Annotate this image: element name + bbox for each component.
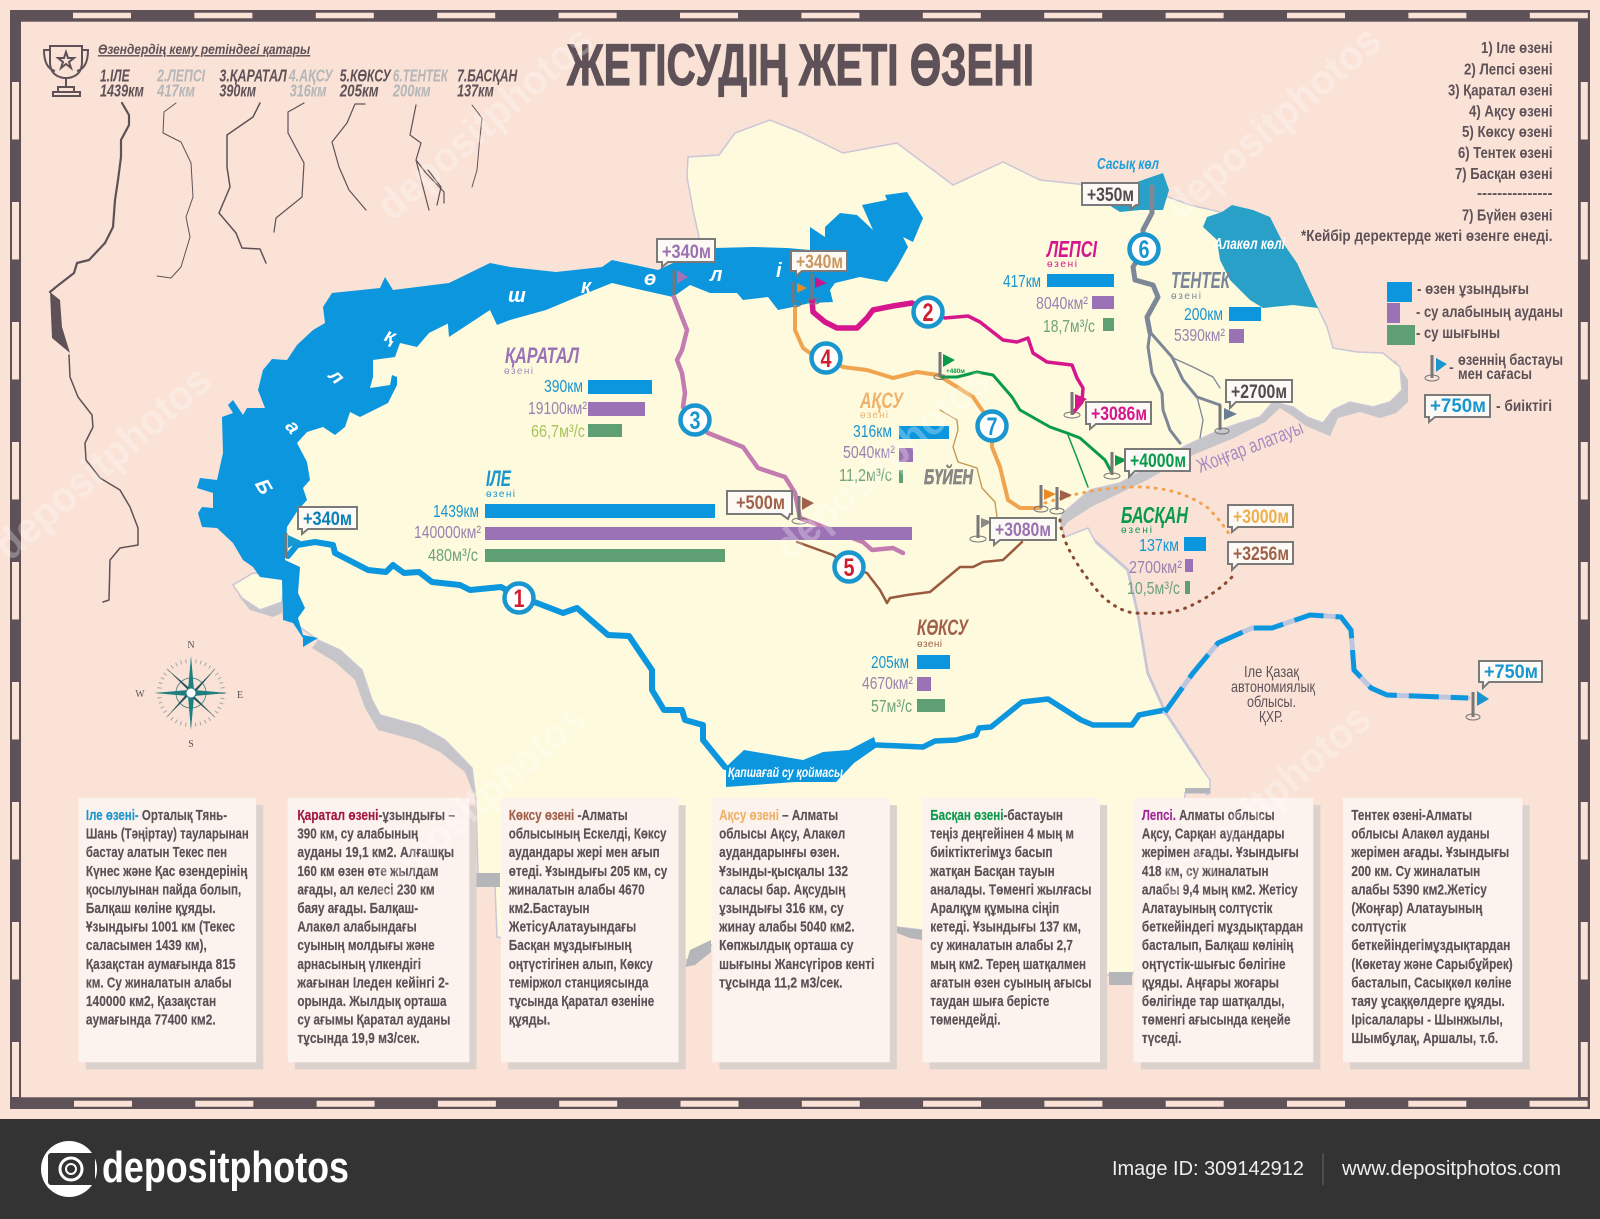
compass rose: W bbox=[135, 689, 145, 700]
map legend: - bbox=[1449, 359, 1454, 375]
river silhouettes ordered by length bbox=[50, 103, 482, 602]
bars: Koksu: өзені bbox=[917, 639, 942, 650]
map legend: өзеннің бастауы bbox=[1458, 352, 1563, 369]
panel: Koksu river: Көксу өзені -Алматы bbox=[509, 808, 628, 824]
panel: Tentek river: солтүстік bbox=[1351, 920, 1407, 936]
elevation callouts: +3256м bbox=[1233, 544, 1289, 565]
icon: trophy bbox=[44, 46, 88, 96]
bars: Ile: 140000км² bbox=[414, 522, 481, 542]
panel: Karatal river: ағады, ал келесі 230 км bbox=[297, 882, 435, 898]
elevation callouts: +4000м bbox=[1130, 451, 1186, 472]
map: land and water bbox=[233, 120, 1408, 985]
panel: Baskan river: Аралқұм құмына сіңіп bbox=[930, 901, 1059, 917]
panel: Ile river: аумағында 77400 км2. bbox=[86, 1012, 216, 1028]
bars: Aksu: 11,2м³/с bbox=[839, 465, 892, 485]
panel: Koksu river: облысының Ескелді, Көксу bbox=[509, 827, 667, 843]
panel: Karatal river: Алакөл алабындағы bbox=[297, 920, 417, 936]
panel: Lepsi river: Лепсі. Алматы облысы bbox=[1142, 808, 1275, 824]
river 6: Tentek bbox=[1133, 187, 1220, 443]
river list, top right: 4) Ақсу өзені bbox=[1469, 104, 1552, 121]
river 1: Ile with Kapshagay reservoir: Қапшағай су қоймасы bbox=[728, 764, 843, 780]
footer bar bbox=[0, 1119, 1600, 1219]
panel: Koksu river: құяды. bbox=[509, 1012, 550, 1028]
numbered river markers bbox=[504, 234, 1158, 613]
elevation callouts: +500м bbox=[736, 493, 785, 514]
footer bar: depositphotos bbox=[102, 1143, 349, 1192]
length ranking, top left: 205км bbox=[339, 81, 379, 101]
panel: Lepsi river: түседі. bbox=[1142, 1031, 1181, 1047]
dotted outline: Baskan source bbox=[1045, 487, 1234, 613]
lake Balkhash: л bbox=[709, 264, 723, 286]
river 3: Karatal bbox=[674, 297, 903, 553]
title: ЖЕТІСУДІҢ ЖЕТІ ӨЗЕНІ bbox=[566, 33, 1034, 98]
bars: Karatal: өзені bbox=[504, 366, 533, 377]
bars: Baskan: 2700км² bbox=[1129, 557, 1182, 577]
bars: Baskan: 137км bbox=[1139, 535, 1179, 555]
numbered river markers: 5 bbox=[844, 554, 855, 582]
stock watermark: depositphotos bbox=[1155, 16, 1390, 229]
river 7: Baskan bbox=[942, 372, 1112, 487]
length ranking, top left: 2.ЛЕПСІ bbox=[156, 66, 206, 86]
bars: Ile: 1439км bbox=[433, 501, 479, 521]
river list, top right: *Кейбір деректерде жеті өзенге енеді. bbox=[1301, 228, 1552, 245]
bars: Koksu: КӨКСУ bbox=[917, 615, 969, 640]
panel: Aksu river: Көпжылдық орташа су bbox=[719, 938, 854, 954]
length ranking, top left: 7.БАСҚАН bbox=[457, 66, 518, 86]
lake Sasyk bbox=[1087, 156, 1169, 212]
panel: Lepsi river: беткейіндегі мұздықтардан bbox=[1142, 920, 1303, 936]
lake Sasyk: Сасық көл bbox=[1097, 156, 1159, 173]
elevation callouts: +3086м bbox=[1091, 404, 1147, 425]
panel: Tentek river: Тентек өзені-Алматы bbox=[1351, 808, 1472, 824]
panel: Karatal river: баяу ағады. Балқаш- bbox=[297, 901, 418, 917]
elevation callouts bbox=[298, 183, 1542, 688]
elevation callouts: +340м bbox=[662, 242, 711, 263]
panel: Karatal river: тұсында 19,9 м3/сек. bbox=[297, 1031, 420, 1047]
panel: Baskan river: теңіз деңгейінен 4 мың м bbox=[930, 827, 1074, 843]
panel: Tentek river: (Көкетау және Сарыбұйрек) bbox=[1351, 957, 1513, 973]
compass rose bbox=[135, 640, 243, 750]
panel: Karatal river: ауданы 19,1 км2. Алғашқы bbox=[297, 845, 454, 861]
river list, top right: 1) Іле өзені bbox=[1481, 40, 1552, 57]
elevation callouts: +3080м bbox=[995, 520, 1051, 541]
panel: Lepsi river: құяды. Аңғары жоғары bbox=[1142, 975, 1279, 991]
panel: Aksu river: облысы Ақсу, Алакөл bbox=[719, 827, 845, 843]
map legend: - су алабының ауданы bbox=[1416, 304, 1563, 321]
panel: Baskan river: таудан шыға берісте bbox=[930, 994, 1049, 1010]
panel: Ile river: Іле өзені- Орталық Тянь- bbox=[86, 808, 227, 824]
panel: Koksu river: теміржол станциясында bbox=[509, 975, 649, 991]
elevation callouts: +340м bbox=[796, 252, 843, 273]
length ranking, top left: 137км bbox=[457, 81, 494, 101]
panel: Karatal river: 160 км өзен өте жылдам bbox=[297, 864, 438, 880]
numbered river markers: 6 bbox=[1138, 236, 1150, 264]
bars: Ile: 480м³/с bbox=[428, 545, 478, 565]
panel: Ile river: саласымен 1439 км), bbox=[86, 938, 207, 954]
map legend: +750м bbox=[1430, 396, 1486, 417]
panel: Aksu river: аудандарынғы өзен. bbox=[719, 845, 840, 861]
panel: Karatal river: арнасының үлкендігі bbox=[297, 957, 421, 973]
bars: Karatal: 19100км² bbox=[528, 398, 587, 418]
panel: Ile river: Күнес және Қас өзендерінің bbox=[86, 864, 247, 880]
map legend: - биіктігі bbox=[1496, 398, 1552, 415]
panel: Koksu river: оңтүстігінен алып, Көксу bbox=[509, 957, 653, 973]
bars: Aksu: АҚСУ bbox=[859, 388, 905, 413]
length ranking, top left: 1439км bbox=[100, 81, 144, 101]
panel: Ile river: Ұзындығы 1001 км (Текес bbox=[86, 920, 235, 936]
panel: Tentek river: алабы 5390 км2.Жетісу bbox=[1351, 882, 1488, 898]
panel: Aksu river bbox=[712, 798, 897, 1069]
panel: Tentek river: басталып, Сасықкөл көліне bbox=[1351, 975, 1512, 991]
panel: Ile river: Қазақстан аумағында 815 bbox=[86, 957, 236, 973]
panel: Aksu river: саласы бар. Ақсудың bbox=[719, 882, 845, 898]
bars: Lepsi: 18,7м³/с bbox=[1043, 316, 1095, 336]
panel: Karatal river: Қаратал өзені-ұзындығы – bbox=[297, 808, 455, 824]
panel: Koksu river bbox=[501, 798, 686, 1069]
stock watermark: depositphotos bbox=[765, 356, 1000, 569]
panel: Lepsi river: бөлігінде тар шатқалды, bbox=[1142, 994, 1284, 1010]
bars: Karatal: 66,7м³/с bbox=[531, 421, 585, 441]
panel: Koksu river: Басқан мұздығының bbox=[509, 938, 632, 954]
panel: Tentek river: таяу ұсаққөлдерге құяды. bbox=[1351, 994, 1505, 1010]
panel: Tentek river: 200 км. Су жиналатын bbox=[1351, 864, 1480, 880]
panel: Baskan river: кетеді. Ұзындығы 137 км, bbox=[930, 920, 1081, 936]
river list, top right: 6) Тентек өзені bbox=[1458, 145, 1552, 162]
lake Balkhash: ө bbox=[644, 268, 656, 290]
panel: Karatal river: суының молдығы және bbox=[297, 938, 435, 954]
river list, top right bbox=[1301, 40, 1552, 245]
river 4: Aksu bbox=[795, 307, 1040, 508]
panel: Tentek river: облысы Алакөл ауданы bbox=[1351, 827, 1490, 843]
map legend: мен сағасы bbox=[1458, 366, 1532, 383]
river list, top right: 5) Көксу өзені bbox=[1462, 124, 1552, 141]
panel: Tentek river: Ірісалалары - Шынжылы, bbox=[1351, 1012, 1503, 1028]
region label: Ili Kazakh autonomous prefecture: автономиялық bbox=[1231, 679, 1316, 696]
panel: Baskan river: су жиналатын алабы 2,7 bbox=[930, 938, 1073, 954]
description cards bbox=[79, 798, 1530, 1069]
river list, top right: 7) Бүйен өзені bbox=[1462, 208, 1552, 225]
length ranking, top left: 390км bbox=[219, 81, 256, 101]
lake Balkhash: ш bbox=[508, 285, 526, 307]
length ranking, top left: 1.ІЛЕ bbox=[100, 66, 130, 86]
bars: Tentek: ТЕНТЕК bbox=[1171, 267, 1231, 293]
panel: Ile river: қосылуынан пайда болып, bbox=[86, 882, 241, 898]
panel: Tentek river: жерімен ағады. Ұзындығы bbox=[1351, 845, 1509, 861]
region label: Ili Kazakh autonomous prefecture bbox=[1231, 664, 1316, 726]
bars: Aksu bbox=[839, 388, 949, 485]
stock watermark: depositphotos bbox=[367, 16, 602, 229]
river list, top right: 7) Басқан өзені bbox=[1455, 166, 1552, 183]
panel: Karatal river: су ағымы Қаратал ауданы bbox=[297, 1012, 450, 1028]
river: Buyen bbox=[940, 410, 997, 517]
lake Balkhash: Б bbox=[250, 475, 276, 499]
region label: Ili Kazakh autonomous prefecture: облысы. bbox=[1247, 694, 1296, 711]
footer bar: Image ID: 309142912 bbox=[1112, 1158, 1304, 1180]
elevation callouts: +750м bbox=[1484, 662, 1538, 683]
panel: Ile river bbox=[79, 798, 263, 1069]
bars: Tentek bbox=[1171, 267, 1261, 345]
bars: Tentek: 5390км² bbox=[1174, 325, 1225, 345]
panel: Karatal river: жағынан Іледен кейінгі 2- bbox=[297, 975, 449, 991]
panel: Baskan river: төмендейді. bbox=[930, 1012, 1001, 1028]
panel: Lepsi river: басталып, Балқаш көлінің bbox=[1142, 938, 1293, 954]
bars: Koksu: 4670км² bbox=[862, 673, 913, 693]
lake Balkhash: і bbox=[776, 260, 782, 282]
panel: Lepsi river: Алатауының солтүстік bbox=[1142, 901, 1273, 917]
panel: Lepsi river: Ақсу, Сарқан аудандары bbox=[1142, 827, 1284, 843]
panel: Baskan river: биіктіктегімұз басып bbox=[930, 845, 1053, 861]
region label: Ili Kazakh autonomous prefecture: ҚХР. bbox=[1259, 709, 1283, 726]
length ranking, top left: 4.АҚСУ bbox=[288, 66, 334, 86]
mountain label: Zhongar Alatau: Жоңғар алатауы bbox=[1194, 417, 1306, 478]
length ranking, top left: 6.ТЕНТЕК bbox=[393, 66, 449, 86]
river 5: Koksu bbox=[797, 542, 1022, 603]
bars: Karatal: 390км bbox=[544, 376, 583, 396]
panel: Koksu river: жиналатын алабы 4670 bbox=[508, 882, 645, 898]
footer bar: www.depositphotos.com bbox=[1341, 1158, 1561, 1180]
length ranking, top left: 316км bbox=[290, 81, 327, 101]
panel: Baskan river: жатқан Басқан тауын bbox=[929, 864, 1055, 880]
panel: Koksu river: аудандары жері мен ағып bbox=[509, 845, 660, 861]
heading: Buyen: БҮЙЕН bbox=[924, 465, 974, 489]
compass rose: S bbox=[188, 739, 194, 750]
panel: Karatal river: орында. Жылдық орташа bbox=[297, 994, 447, 1010]
length ranking, top left: Өзендердің кему ретіндегі қатары bbox=[98, 42, 310, 58]
bars: Karatal: ҚАРАТАЛ bbox=[505, 343, 580, 368]
panel: Baskan river: аналады. Төменгі жылғасы bbox=[930, 882, 1091, 898]
stock watermark: depositphotos bbox=[360, 694, 595, 907]
map legend bbox=[1387, 281, 1563, 422]
compass rose: N bbox=[187, 640, 195, 651]
panel: Karatal river: 390 км, су алабының bbox=[297, 827, 418, 843]
panel: Ile river: Балқаш көліне құяды. bbox=[86, 901, 216, 917]
panel: Aksu river: шығыны Жансүгіров кенті bbox=[719, 957, 874, 973]
lake Alakol: Алакөл көлі bbox=[1213, 236, 1285, 253]
length ranking, top left: 3.ҚАРАТАЛ bbox=[219, 66, 288, 86]
bars: Lepsi: 8040км² bbox=[1036, 293, 1088, 313]
stock watermark bbox=[0, 16, 1390, 907]
river list, top right: 3) Қаратал өзені bbox=[1448, 83, 1552, 100]
river 1: Ile with Kapshagay reservoir bbox=[288, 542, 1468, 787]
panel: Baskan river: мың км2. Терең шатқалмен bbox=[930, 957, 1086, 973]
lake Balkhash: а bbox=[281, 416, 305, 438]
bars: Baskan bbox=[1121, 502, 1206, 598]
bars: Ile: өзені bbox=[486, 489, 515, 500]
panel: Ile river: бастау алатын Текес пен bbox=[86, 845, 227, 861]
numbered river markers: 1 bbox=[514, 585, 525, 613]
bars: Aksu: 5040км² bbox=[843, 442, 895, 462]
bars: Baskan: 10,5м³/с bbox=[1127, 578, 1180, 598]
stock watermark: depositphotos bbox=[1145, 694, 1380, 907]
map legend: - су шығыны bbox=[1416, 325, 1500, 342]
panel: Baskan river: Басқан өзені-бастауын bbox=[930, 808, 1063, 824]
bars: Karatal bbox=[504, 343, 652, 441]
bars: Lepsi bbox=[1003, 236, 1114, 336]
bars: Koksu bbox=[862, 615, 969, 716]
compass rose: E bbox=[237, 690, 243, 701]
bars: Tentek: өзені bbox=[1171, 291, 1201, 302]
map legend: - өзен ұзындығы bbox=[1417, 281, 1529, 298]
lake Balkhash: к bbox=[581, 276, 592, 298]
river 2: Lepsi bbox=[812, 300, 1083, 413]
region label: Ili Kazakh autonomous prefecture: Іле Қазақ bbox=[1244, 664, 1300, 681]
panel: Lepsi river: төменгі ағысында кеңейе bbox=[1142, 1012, 1290, 1028]
elevation callouts: +3000м bbox=[1233, 507, 1289, 528]
lake Alakol bbox=[1203, 205, 1318, 308]
panel: Tentek river: беткейіндегімұздықтардан bbox=[1351, 938, 1510, 954]
panel: Baskan river bbox=[922, 798, 1107, 1069]
bars: Koksu: 57м³/с bbox=[871, 696, 912, 716]
length ranking, top left bbox=[98, 42, 518, 101]
flags: river sources and mouths bbox=[286, 270, 1489, 720]
panel: Aksu river: ұзындығы 316 км, су bbox=[719, 901, 844, 917]
river list, top right: --------------- bbox=[1477, 185, 1552, 202]
panel: Tentek river: (Жоңғар) Алатауының bbox=[1351, 901, 1483, 917]
bars: Lepsi: ЛЕПСІ bbox=[1046, 236, 1097, 262]
panel: Tentek river bbox=[1343, 798, 1530, 1069]
panel: Aksu river: тұсында 11,2 м3/сек. bbox=[719, 975, 843, 991]
panel: Koksu river: өтеді. Ұзындығы 205 км, су bbox=[509, 864, 668, 880]
flags: river sources and mouths: +480м bbox=[946, 369, 966, 375]
lake Balkhash bbox=[197, 192, 923, 647]
length ranking, top left: 5.КӨКСУ bbox=[340, 66, 392, 86]
bars: Ile: ІЛЕ bbox=[486, 466, 512, 491]
panel: Ile river: км. Су жиналатын алабы bbox=[86, 975, 232, 991]
bars: Baskan: БАСҚАН bbox=[1121, 502, 1188, 528]
panel: Koksu river: ЖетісуАлатауындағы bbox=[508, 920, 636, 936]
length ranking, top left: 200км bbox=[392, 81, 431, 101]
panel: Lepsi river: жерімен ағады. Ұзындығы bbox=[1141, 845, 1299, 861]
bars: Aksu: 316км bbox=[853, 421, 892, 441]
panel: Aksu river: Ақсу өзені – Алматы bbox=[719, 808, 838, 824]
panel: Lepsi river bbox=[1134, 798, 1320, 1069]
bars: Lepsi: өзені bbox=[1047, 259, 1077, 270]
numbered river markers: 4 bbox=[820, 345, 832, 373]
bars: Aksu: өзені bbox=[860, 410, 888, 421]
bars: Ile bbox=[414, 466, 912, 565]
bars: Lepsi: 417км bbox=[1003, 271, 1041, 291]
panel: Lepsi river: алабы 9,4 мың км2. Жетісу bbox=[1142, 882, 1298, 898]
lake Balkhash: л bbox=[323, 364, 349, 389]
panel: Koksu river: км2.Бастауын bbox=[509, 901, 589, 917]
numbered river markers: 2 bbox=[922, 299, 934, 327]
panel: Aksu river: жинау алабы 5040 км2. bbox=[718, 920, 855, 936]
bars: Koksu: 205км bbox=[871, 652, 909, 672]
bars: Tentek: 200км bbox=[1184, 304, 1223, 324]
panel: Karatal river bbox=[288, 798, 477, 1069]
panel: Ile river: 140000 км2, Қазақстан bbox=[86, 994, 216, 1010]
panel: Baskan river: ағатын өзен суының ағысы bbox=[930, 975, 1092, 991]
bars: Baskan: өзені bbox=[1121, 525, 1152, 536]
elevation callouts: +350м bbox=[1087, 185, 1134, 206]
panel: Koksu river: тұсында Қаратал өзеніне bbox=[509, 994, 654, 1010]
length ranking, top left: 417км bbox=[156, 81, 195, 101]
panel: Ile river: Шань (Тәңіртау) тауларынан bbox=[86, 827, 249, 843]
numbered river markers: 3 bbox=[690, 407, 700, 435]
panel: Aksu river: Ұзынды-қысқалы 132 bbox=[719, 864, 848, 880]
panel: Lepsi river: оңтүстік-шығыс бөлігіне bbox=[1142, 957, 1286, 973]
panel: Tentek river: Шымбұлақ, Аршалы, т.б. bbox=[1351, 1031, 1498, 1047]
lake Balkhash: қ bbox=[382, 324, 399, 349]
panel: Lepsi river: 418 км, су жиналатын bbox=[1142, 864, 1269, 880]
elevation callouts: +340м bbox=[303, 509, 352, 530]
river list, top right: 2) Лепсі өзені bbox=[1464, 62, 1552, 79]
elevation callouts: +2700м bbox=[1231, 382, 1287, 403]
numbered river markers: 7 bbox=[986, 413, 998, 441]
